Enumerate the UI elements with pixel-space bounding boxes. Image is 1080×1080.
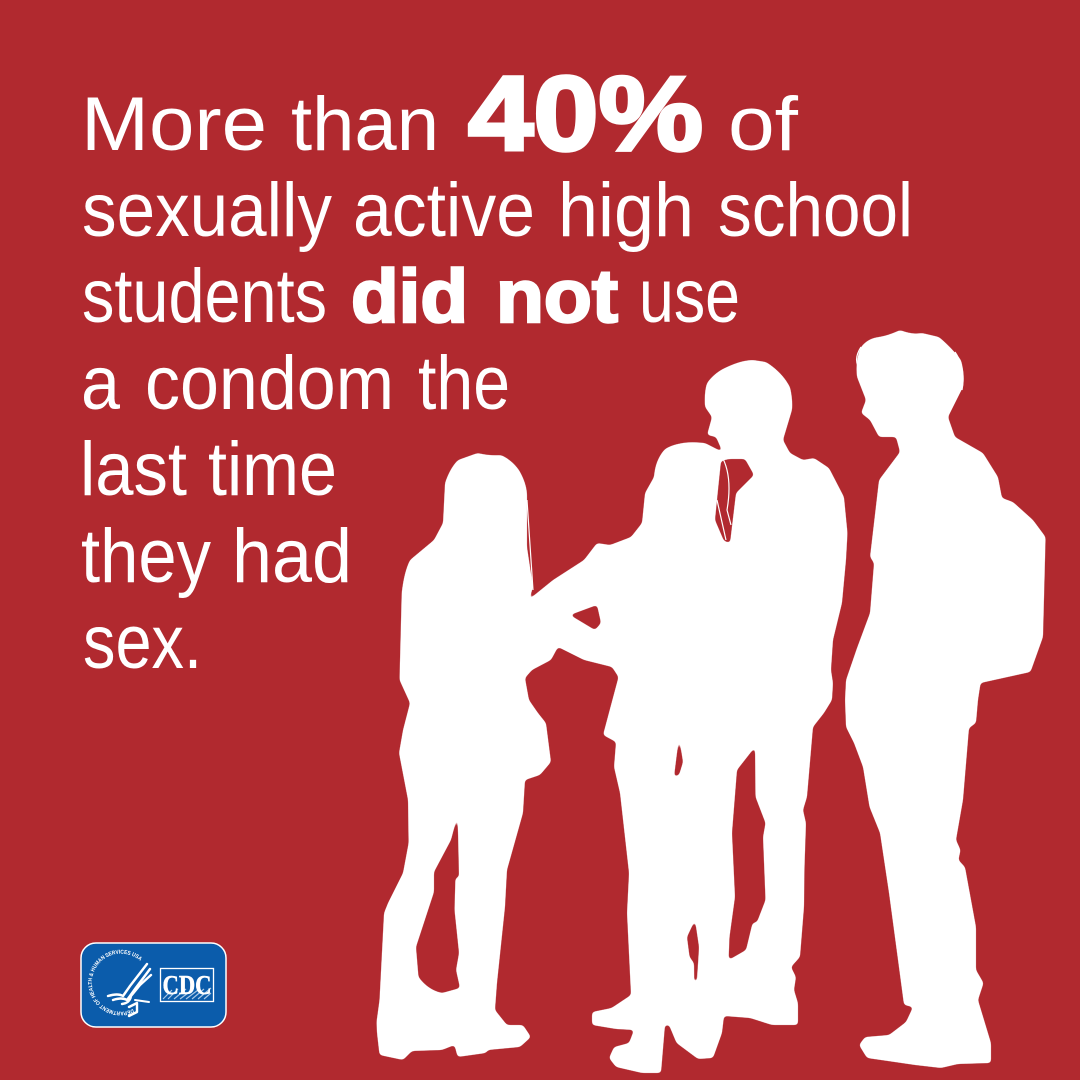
headline text: than xyxy=(291,82,439,167)
headline text: condom xyxy=(145,341,394,426)
headline text: school xyxy=(718,168,913,253)
headline text: the xyxy=(418,341,510,426)
headline text: More xyxy=(81,82,267,167)
headline text: high xyxy=(558,168,694,253)
curly hair strands xyxy=(857,347,963,390)
HHS seal ring text: DEPARTMENT OF HEALTH & HUMAN SERVICES USA xyxy=(88,950,142,1016)
headline text: not xyxy=(496,254,618,338)
headline text: did xyxy=(351,254,468,338)
silhouette: two girls and boy, joined xyxy=(376,360,848,1073)
headline text: students xyxy=(82,254,327,339)
hair strands xyxy=(527,455,731,590)
icon: HHS eagle xyxy=(108,964,151,1016)
CDC box: CDC xyxy=(162,970,212,1000)
headline text: time xyxy=(208,427,337,512)
HHS and CDC logo badge xyxy=(80,942,227,1028)
headline text: use xyxy=(639,254,740,339)
silhouettes of four teenagers xyxy=(376,330,1046,1073)
headline text: sexually xyxy=(82,168,332,253)
headline text: active xyxy=(353,168,535,253)
headline text: of xyxy=(728,82,799,167)
headline text: last xyxy=(80,427,187,512)
headline text xyxy=(80,55,913,685)
headline text: 40% xyxy=(468,55,703,173)
headline text: had xyxy=(232,514,352,599)
headline text: a xyxy=(81,341,121,426)
silhouette: boy with backpack xyxy=(845,330,1046,1068)
headline text: sex. xyxy=(83,600,202,685)
headline text: they xyxy=(81,514,211,599)
